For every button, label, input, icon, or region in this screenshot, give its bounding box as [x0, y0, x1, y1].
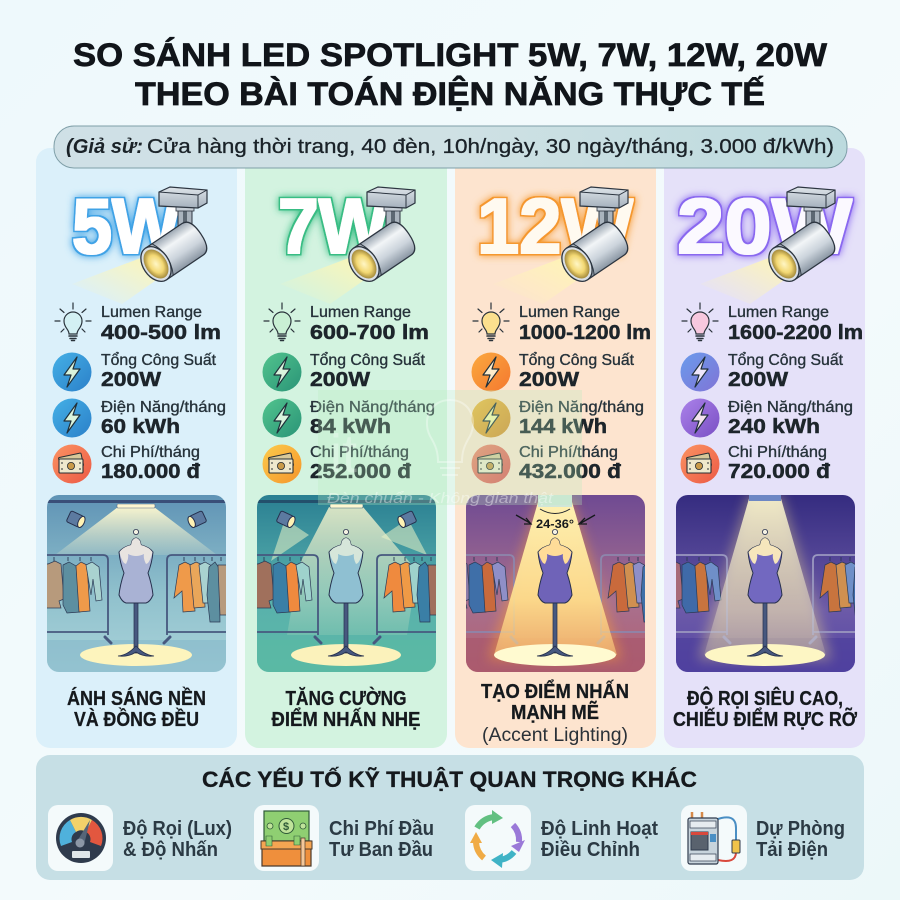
icon: bulb: [55, 303, 91, 340]
heading: CÁC YẾU TỐ KỸ THUẬT QUAN TRỌNG KHÁC: [202, 766, 697, 792]
monthly energy: 240 kWh: [728, 416, 820, 438]
text: load reserve: [756, 818, 845, 861]
monthly energy: 144 kWh: [519, 416, 607, 438]
monthly energy: [519, 399, 644, 438]
text: lux: Độ Rọi (Lux): [123, 818, 232, 840]
assumption banner: [54, 126, 847, 168]
text: lux: [123, 818, 232, 861]
caption: (Accent Lighting): [482, 725, 628, 746]
assumption banner: (Giả sử:: [66, 136, 143, 158]
lumen range: Lumen Range: [519, 304, 620, 321]
icon: money: [472, 444, 510, 484]
monthly cost: [310, 444, 412, 483]
total power: Tổng Công Suất: [310, 351, 426, 369]
monthly energy: [101, 399, 226, 438]
caption: [481, 680, 629, 746]
illustration: soft accent: [257, 495, 436, 672]
monthly energy: [728, 399, 853, 438]
text: load reserve: Dự Phòng: [756, 818, 845, 840]
lumen range: [519, 304, 651, 344]
icon: gauge: [48, 805, 113, 871]
lumen range: Lumen Range: [310, 304, 411, 321]
icon: power: [52, 352, 92, 392]
beam angle label: 24-36°: [536, 517, 574, 531]
icon: money: [52, 444, 92, 484]
icon: bulb: [473, 303, 509, 340]
monthly cost: 720.000 đ: [728, 461, 831, 483]
panel: 5W: [32, 148, 242, 748]
icon: breaker panel: [681, 805, 747, 871]
icon: spotlight: [700, 187, 839, 304]
monthly cost: Chi Phí/tháng: [728, 444, 827, 461]
text: flexibility: [541, 818, 658, 861]
total power: Tổng Công Suất: [101, 351, 217, 369]
icon: adjustment cycle: [465, 805, 531, 871]
lumen range: 1000-1200 lm: [519, 322, 651, 344]
icon: bulb: [264, 303, 300, 340]
text: load reserve: Tải Điện: [756, 839, 828, 861]
text: flexibility: Độ Linh Hoạt: [541, 818, 658, 840]
monthly cost: [101, 444, 201, 483]
panel: other technical factors: [36, 755, 864, 880]
monthly cost: 252.000 đ: [310, 461, 412, 483]
monthly cost: 180.000 đ: [101, 461, 201, 483]
monthly energy: 84 kWh: [310, 416, 391, 438]
text: lux: & Độ Nhấn: [123, 839, 218, 861]
monthly energy: Điện Năng/tháng: [101, 399, 226, 416]
lumen range: 1600-2200 lm: [728, 322, 863, 344]
icon: energy: [52, 398, 92, 438]
watermark: it: [330, 424, 357, 484]
lumen range: 600-700 lm: [310, 322, 429, 344]
heading: 20W: 20W: [677, 182, 852, 270]
monthly cost: [728, 444, 831, 483]
caption: ĐỘ RỌI SIÊU CAO,: [687, 686, 843, 710]
panel: 7W: [242, 148, 452, 748]
icon: power: [680, 352, 720, 392]
caption: [67, 687, 206, 731]
text: upfront cost: [329, 818, 434, 861]
monthly cost: 432.000 đ: [519, 461, 622, 483]
monthly energy: [310, 399, 435, 438]
text: flexibility: Điều Chỉnh: [541, 839, 640, 861]
caption: CHIẾU ĐIỂM RỰC RỠ: [673, 707, 858, 731]
lumen range: Lumen Range: [101, 304, 202, 321]
total power: [728, 351, 844, 391]
watermark: [318, 390, 582, 507]
icon: cash box: [254, 805, 319, 871]
caption: [272, 686, 420, 731]
total power: 200W: [519, 369, 579, 391]
heading: 5W: 5W: [72, 182, 180, 270]
icon: cash box: $: [283, 821, 289, 833]
lumen range: 400-500 lm: [101, 322, 221, 344]
assumption banner: Cửa hàng thời trang, 40 đèn, 10h/ngày, 30 ngày/tháng, 3.000 đ/kWh): [147, 136, 834, 158]
icon: bulb: [682, 303, 718, 340]
text: upfront cost: Tư Ban Đầu: [329, 839, 433, 861]
total power: Tổng Công Suất: [519, 351, 635, 369]
panel: 20W: [664, 148, 865, 748]
total power: 200W: [728, 369, 788, 391]
title: SO SÁNH LED SPOTLIGHT 5W, 7W, 12W, 20W: [73, 37, 828, 73]
illustration: strong accent: [466, 495, 645, 672]
caption: TĂNG CƯỜNG: [286, 686, 406, 710]
icon: spotlight: [280, 187, 419, 304]
icon: spotlight: [72, 187, 211, 304]
illustration: high intensity: [676, 495, 855, 672]
monthly cost: [519, 444, 622, 483]
lumen range: [310, 304, 429, 344]
total power: 200W: [310, 369, 370, 391]
total power: Tổng Công Suất: [728, 351, 844, 369]
icon: power: [262, 352, 302, 392]
monthly energy: 60 kWh: [101, 416, 180, 438]
total power: [101, 351, 217, 391]
caption: VÀ ĐỒNG ĐỀU: [74, 707, 199, 731]
caption: [673, 686, 858, 731]
icon: spotlight: [493, 187, 632, 304]
lumen range: [101, 304, 221, 344]
icon: money: [262, 444, 302, 484]
monthly cost: Chi Phí/tháng: [101, 444, 200, 461]
icon: energy: [472, 398, 510, 438]
arrow: left: [516, 515, 531, 524]
total power: [519, 351, 635, 391]
watermark: Đèn chuẩn - Không gian thật: [327, 490, 554, 507]
icon: energy: [680, 398, 720, 438]
caption: MẠNH MẼ: [511, 701, 599, 724]
monthly energy: Điện Năng/tháng: [519, 399, 644, 416]
heading: 7W: 7W: [278, 182, 388, 270]
heading: 12W: 12W: [477, 182, 633, 270]
total power: [310, 351, 426, 391]
monthly energy: Điện Năng/tháng: [310, 399, 435, 416]
caption: ÁNH SÁNG NỀN: [67, 687, 206, 710]
text: upfront cost: Chi Phí Đầu: [329, 818, 434, 840]
icon: energy: [262, 398, 302, 438]
panel: 12W: [455, 168, 656, 748]
lumen range: [728, 304, 863, 344]
icon: power: [472, 352, 510, 392]
lumen range: Lumen Range: [728, 304, 829, 321]
title: THEO BÀI TOÁN ĐIỆN NĂNG THỰC TẾ: [135, 76, 765, 112]
total power: 200W: [101, 369, 161, 391]
icon: money: [680, 444, 720, 484]
monthly cost: Chi Phí/tháng: [519, 444, 618, 461]
monthly energy: Điện Năng/tháng: [728, 399, 853, 416]
monthly cost: Chi Phí/tháng: [310, 444, 409, 461]
caption: TẠO ĐIỂM NHẤN: [481, 680, 629, 703]
title: [73, 37, 828, 112]
illustration: ambient lighting: [47, 495, 226, 672]
caption: ĐIỂM NHẤN NHẸ: [272, 708, 420, 731]
arrow: right: [579, 515, 595, 524]
